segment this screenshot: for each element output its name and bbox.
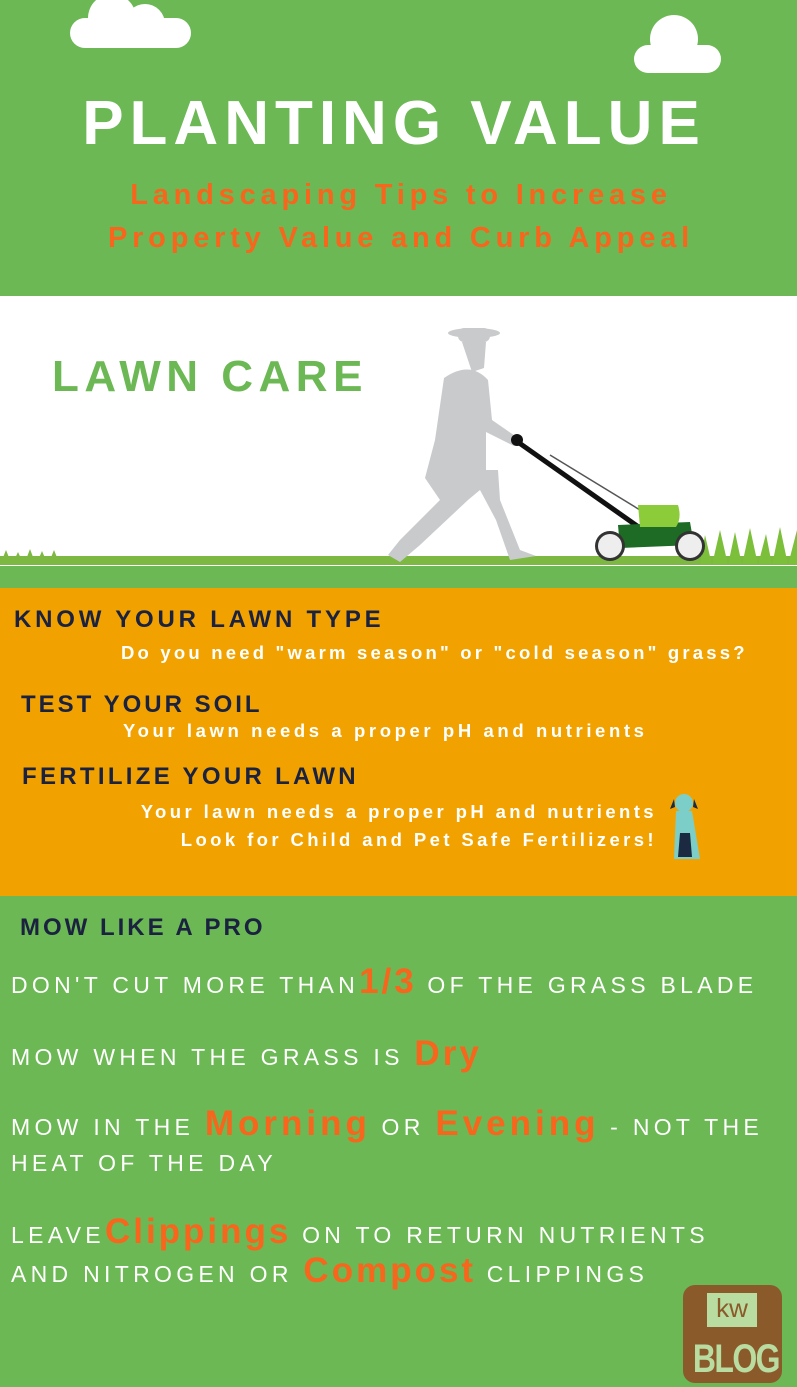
header panel (0, 0, 797, 296)
subtitle: Property Value and Curb Appeal (108, 222, 694, 254)
tip 2: MOW WHEN THE GRASS IS Dry (11, 1034, 482, 1073)
panel: lawn care hero (0, 296, 797, 588)
logo: kw blog: BLOG (693, 1337, 779, 1381)
heading: know your lawn type: KNOW YOUR LAWN TYPE (14, 606, 384, 633)
tip 3: MOW IN THE Morning OR Evening - NOT THE (11, 1104, 763, 1143)
heading: test soil: TEST YOUR SOIL (21, 691, 263, 718)
text: Do you need "warm season" or "cold season" grass? (121, 642, 748, 663)
panel: mow like a pro (0, 896, 797, 1387)
logo: kw blog: kw (716, 1293, 748, 1323)
logo: kw blog (683, 1285, 782, 1383)
illustration: man mowing (0, 328, 797, 588)
tip 3 (11, 1104, 763, 1176)
heading: fertilize: FERTILIZE YOUR LAWN (22, 763, 359, 790)
panel: lawn type tips (0, 588, 797, 896)
text: Your lawn needs a proper pH and nutrients (123, 720, 648, 741)
subtitle (108, 179, 694, 254)
text: Look for Child and Pet Safe Fertilizers! (181, 829, 657, 850)
heading: lawn care: LAWN CARE (52, 352, 368, 401)
tip 4: AND NITROGEN OR Compost CLIPPINGS (11, 1251, 648, 1290)
text (141, 801, 657, 850)
subtitle: Landscaping Tips to Increase (130, 179, 672, 211)
title: PLANTING VALUE (82, 89, 706, 158)
icon: dog (670, 794, 700, 859)
heading: MOW LIKE A PRO (20, 914, 266, 941)
tip 4 (11, 1212, 709, 1290)
tip 1: DON'T CUT MORE THAN1/3 OF THE GRASS BLADE (11, 962, 757, 1001)
icon: cloud right (634, 15, 721, 73)
tip 4: LEAVEClippings ON TO RETURN NUTRIENTS (11, 1212, 709, 1251)
text: Your lawn needs a proper pH and nutrients (141, 801, 657, 822)
icon: cloud left (70, 0, 191, 48)
tip 3: HEAT OF THE DAY (11, 1150, 277, 1176)
